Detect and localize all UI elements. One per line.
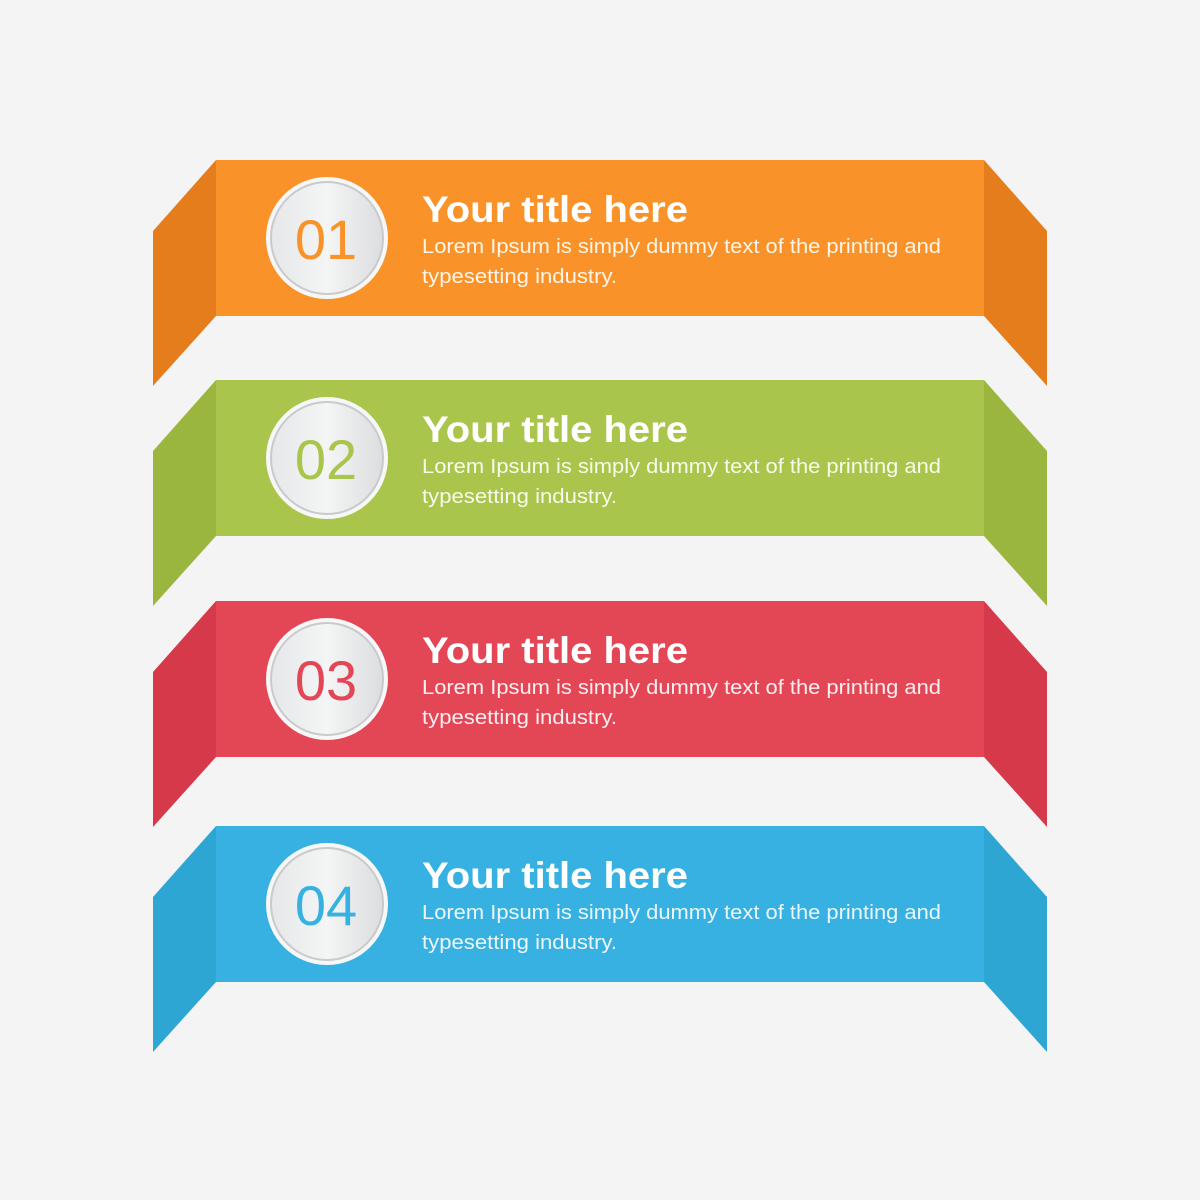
left flap (153, 160, 216, 386)
right flap (984, 826, 1047, 1052)
number badge 04: 04 (295, 874, 357, 937)
title 03: Your title here (422, 630, 688, 671)
left flap (153, 380, 216, 606)
number badge 01 (266, 177, 388, 299)
ribbon body (216, 826, 984, 982)
body text 01: typesetting industry. (422, 266, 617, 288)
title 02: Your title here (422, 409, 688, 450)
right flap (984, 160, 1047, 386)
body text 03: typesetting industry. (422, 707, 617, 729)
body text 03: Lorem Ipsum is simply dummy text of the printing and (422, 677, 941, 699)
banner 02 (153, 380, 1047, 606)
ribbon body (216, 160, 984, 316)
banner 01 (153, 160, 1047, 386)
number badge 02: 02 (295, 428, 357, 491)
body text 02: typesetting industry. (422, 486, 617, 508)
left flap (153, 601, 216, 827)
banner 04 (153, 826, 1047, 1052)
title 01: Your title here (422, 189, 688, 230)
right flap (984, 601, 1047, 827)
title 04: Your title here (422, 855, 688, 896)
banner 03 (153, 601, 1047, 827)
right flap (984, 380, 1047, 606)
number badge 03 (266, 618, 388, 740)
body text 01: Lorem Ipsum is simply dummy text of the printing and (422, 236, 941, 258)
body text 04: Lorem Ipsum is simply dummy text of the printing and (422, 902, 941, 924)
ribbon body (216, 380, 984, 536)
number badge 02 (266, 397, 388, 519)
number badge 03: 03 (295, 649, 357, 712)
number badge 04 (266, 843, 388, 965)
body text 02: Lorem Ipsum is simply dummy text of the printing and (422, 456, 941, 478)
ribbon body (216, 601, 984, 757)
number badge 01: 01 (295, 208, 357, 271)
left flap (153, 826, 216, 1052)
body text 04: typesetting industry. (422, 932, 617, 954)
